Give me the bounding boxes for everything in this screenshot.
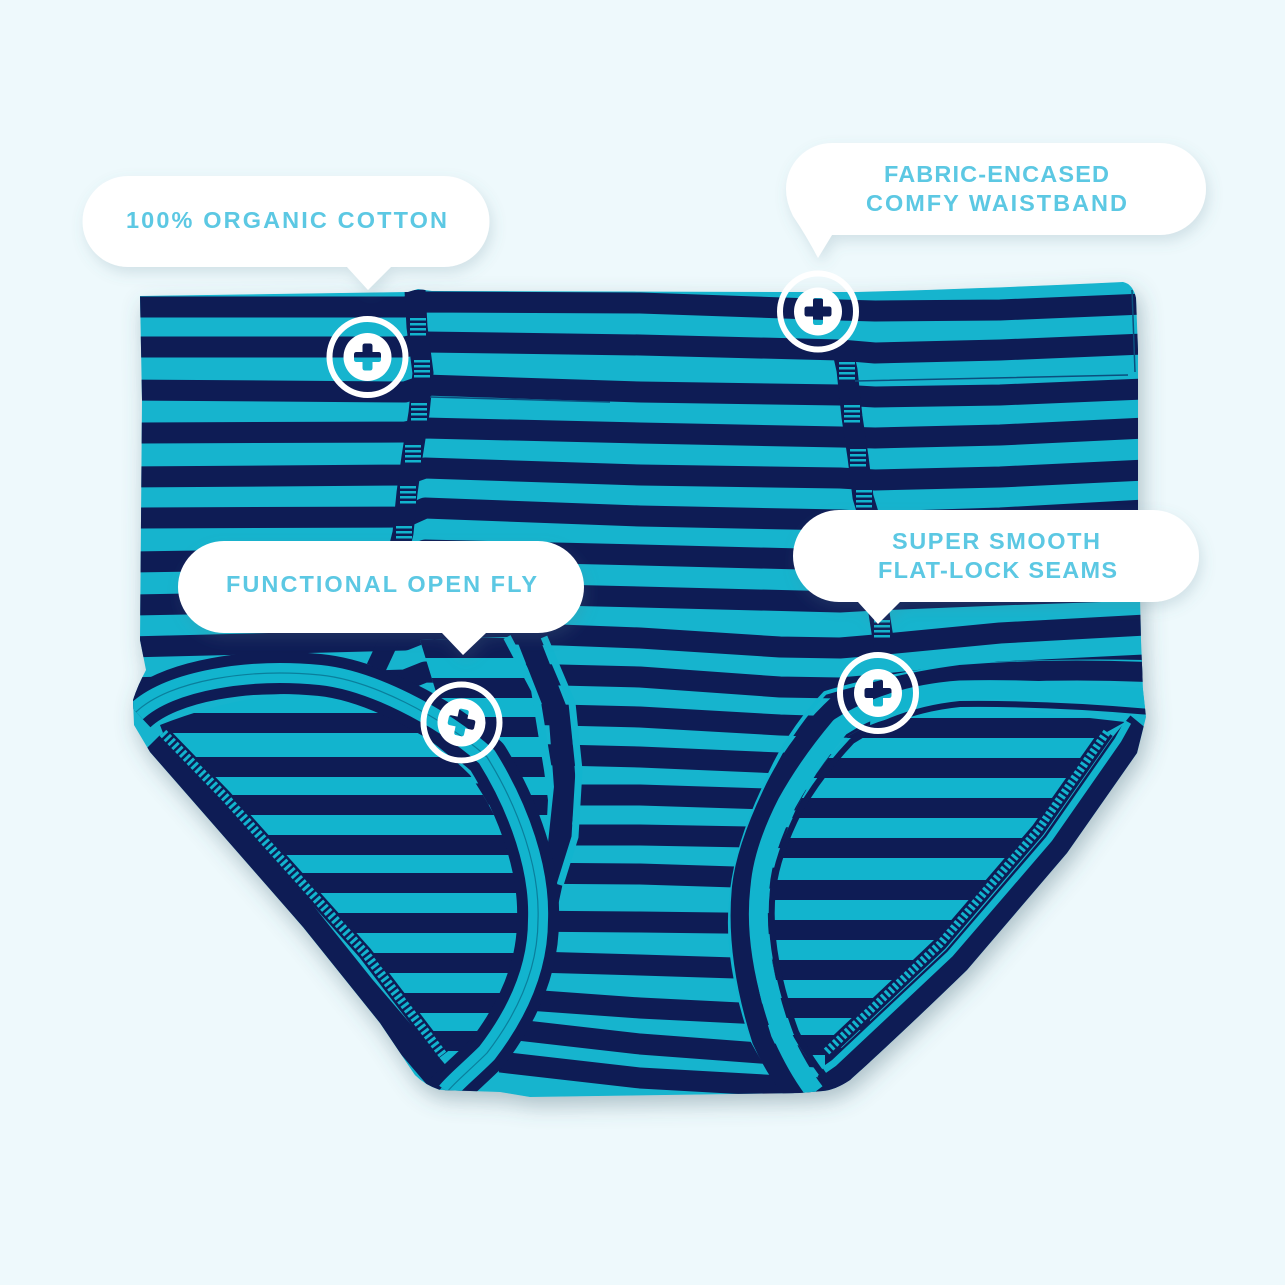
hotspot: waistband	[780, 274, 856, 350]
waistband stitching lines	[430, 290, 1135, 402]
fabric clipped to silhouette	[130, 290, 1160, 1100]
hotspot: open fly	[424, 684, 500, 760]
front seam right	[843, 352, 884, 645]
label: FABRIC-ENCASED	[884, 161, 1109, 187]
hotspot: cotton	[330, 319, 406, 395]
bubble shape	[82, 176, 490, 290]
callout: super smooth flat-lock seams	[793, 510, 1199, 624]
left leg seam band	[150, 733, 445, 1085]
garment: striped briefs	[130, 282, 1160, 1100]
label second line: FLAT-LOCK SEAMS	[878, 557, 1117, 583]
hotspot: flat-lock seams	[840, 655, 916, 731]
label: FUNCTIONAL OPEN FLY	[226, 571, 537, 597]
right leg binding	[730, 662, 1150, 1092]
bubble shape	[793, 510, 1199, 624]
left leg interior	[160, 713, 518, 1051]
stripes between left binding and fly	[420, 637, 548, 835]
front seam left	[376, 290, 423, 668]
garment silhouette	[133, 282, 1146, 1097]
right leg interior	[770, 718, 1124, 1068]
callout: functional open fly	[178, 541, 584, 655]
callout: 100% organic cotton	[82, 176, 490, 290]
label: 100% ORGANIC COTTON	[126, 207, 447, 233]
label: SUPER SMOOTH	[892, 528, 1100, 554]
navy body stripes	[130, 302, 1145, 1090]
callout: fabric-encased comfy waistband	[786, 143, 1206, 258]
bubble shape	[178, 541, 584, 655]
left leg binding	[136, 673, 538, 1092]
fly opening binding	[507, 636, 579, 900]
label second line: COMFY WAISTBAND	[866, 190, 1127, 216]
right leg seam band	[824, 722, 1142, 1085]
bubble shape	[786, 143, 1206, 258]
